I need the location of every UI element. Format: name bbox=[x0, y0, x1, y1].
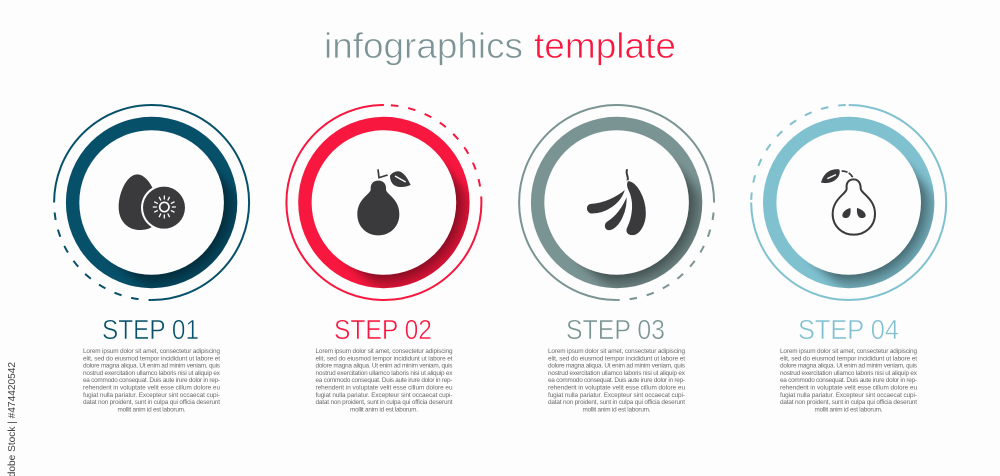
disc: step 4 bbox=[763, 116, 934, 288]
body text 4: elit, sed do eiusmod tempor incididunt ut labore et bbox=[780, 355, 917, 362]
panel: step 3 bbox=[519, 105, 730, 413]
body text 1: ea commodo consequat. Duis aute irure dolor in rep- bbox=[83, 377, 220, 384]
body text 1: fugiat nulla pariatur. Excepteur sint occaecat cupi- bbox=[83, 392, 220, 399]
body text 1: rehenderit in voluptate velit esse cillum dolore eu bbox=[83, 384, 220, 392]
icon: egg and kiwi bbox=[119, 174, 187, 231]
disc: step 3 bbox=[530, 116, 702, 288]
body text 1: Lorem ipsum dolor sit amet, consectetur adipiscing bbox=[83, 348, 220, 355]
body text 3: ea commodo consequat. Duis aute irure dolor in rep- bbox=[548, 377, 685, 384]
disc: step 1 bbox=[66, 116, 238, 288]
body text 4: mollit anim id est laborum. bbox=[814, 406, 883, 413]
step label 2: STEP 02 bbox=[334, 314, 432, 345]
body text 3: fugiat nulla pariatur. Excepteur sint occaecat cupi- bbox=[548, 392, 685, 399]
title bbox=[324, 25, 676, 66]
body text 1: mollit anim id est laborum. bbox=[118, 406, 186, 413]
body text 1 bbox=[83, 348, 221, 413]
step label 3: STEP 03 bbox=[566, 314, 665, 345]
body text 2: Lorem ipsum dolor sit amet, consectetur adipiscing bbox=[316, 348, 453, 355]
body text 2: nostrud exercitation ullamco laboris nisi ut aliquip ex bbox=[316, 370, 453, 377]
progress ring: step 4 bbox=[751, 105, 946, 300]
body text 3: datat non proident, sunt in culpa qui officia deserunt bbox=[548, 399, 685, 406]
body text 3: Lorem ipsum dolor sit amet, consectetur adipiscing bbox=[548, 348, 685, 355]
body text 4: ea commodo consequat. Duis aute irure dolor in rep- bbox=[780, 377, 917, 384]
body text 2: mollit anim id est laborum. bbox=[350, 406, 418, 413]
body text 1: nostrud exercitation ullamco laboris nisi ut aliquip ex bbox=[83, 370, 221, 377]
panel: step 1 bbox=[54, 105, 265, 413]
body text 3 bbox=[548, 348, 686, 413]
body text 2: rehenderit in voluptate velit esse cillum dolore eu bbox=[316, 384, 453, 392]
body text 1: dolore magna aliqua. Ut enim ad minim veniam, quis bbox=[83, 363, 220, 370]
body text 1: datat non proident, sunt in culpa qui officia deserunt bbox=[83, 399, 220, 406]
body text 2 bbox=[316, 348, 453, 413]
progress ring: step 1 bbox=[54, 105, 249, 300]
icon: bananas bbox=[586, 170, 646, 236]
body text 3: dolore magna aliqua. Ut enim ad minim veniam, quis bbox=[548, 363, 685, 370]
progress ring: step 3 bbox=[519, 105, 714, 300]
title: infographics bbox=[324, 25, 523, 66]
body text 4: datat non proident, sunt in culpa qui officia deserunt bbox=[780, 399, 917, 406]
icon: pear bbox=[357, 169, 411, 235]
step label 1: STEP 01 bbox=[102, 314, 199, 345]
body text 3: rehenderit in voluptate velit esse cillum dolore eu bbox=[548, 384, 685, 392]
body text 3: elit, sed do eiusmod tempor incididunt ut labore et bbox=[548, 355, 685, 362]
panel: step 2 bbox=[286, 105, 498, 413]
icon: pear half with seeds bbox=[821, 169, 875, 235]
body text 4: dolore magna aliqua. Ut enim ad minim veniam, quis bbox=[780, 363, 917, 370]
progress ring: step 2 bbox=[286, 105, 481, 300]
body text 4: fugiat nulla pariatur. Excepteur sint occaecat cupi- bbox=[780, 392, 917, 399]
body text 2: datat non proident, sunt in culpa qui officia deserunt bbox=[316, 399, 453, 406]
body text 1: elit, sed do eiusmod tempor incididunt ut labore et bbox=[83, 355, 220, 362]
body text 2: dolore magna aliqua. Ut enim ad minim veniam, quis bbox=[316, 363, 452, 370]
step label 4: STEP 04 bbox=[798, 314, 899, 345]
body text 4 bbox=[780, 348, 918, 413]
title: template bbox=[534, 25, 676, 66]
disc: step 2 bbox=[298, 116, 470, 288]
body text 2: ea commodo consequat. Duis aute irure dolor in rep- bbox=[316, 377, 452, 384]
panel: step 4 bbox=[751, 105, 963, 413]
body text 3: nostrud exercitation ullamco laboris nisi ut aliquip ex bbox=[548, 370, 686, 377]
body text 3: mollit anim id est laborum. bbox=[582, 406, 651, 413]
body text 4: rehenderit in voluptate velit esse cillum dolore eu bbox=[780, 384, 917, 392]
body text 2: fugiat nulla pariatur. Excepteur sint occaecat cupi- bbox=[316, 392, 452, 399]
body text 4: nostrud exercitation ullamco laboris nisi ut aliquip ex bbox=[780, 370, 918, 377]
body text 4: Lorem ipsum dolor sit amet, consectetur adipiscing bbox=[780, 348, 917, 355]
body text 2: elit, sed do eiusmod tempor incididunt ut labore et bbox=[316, 355, 453, 362]
